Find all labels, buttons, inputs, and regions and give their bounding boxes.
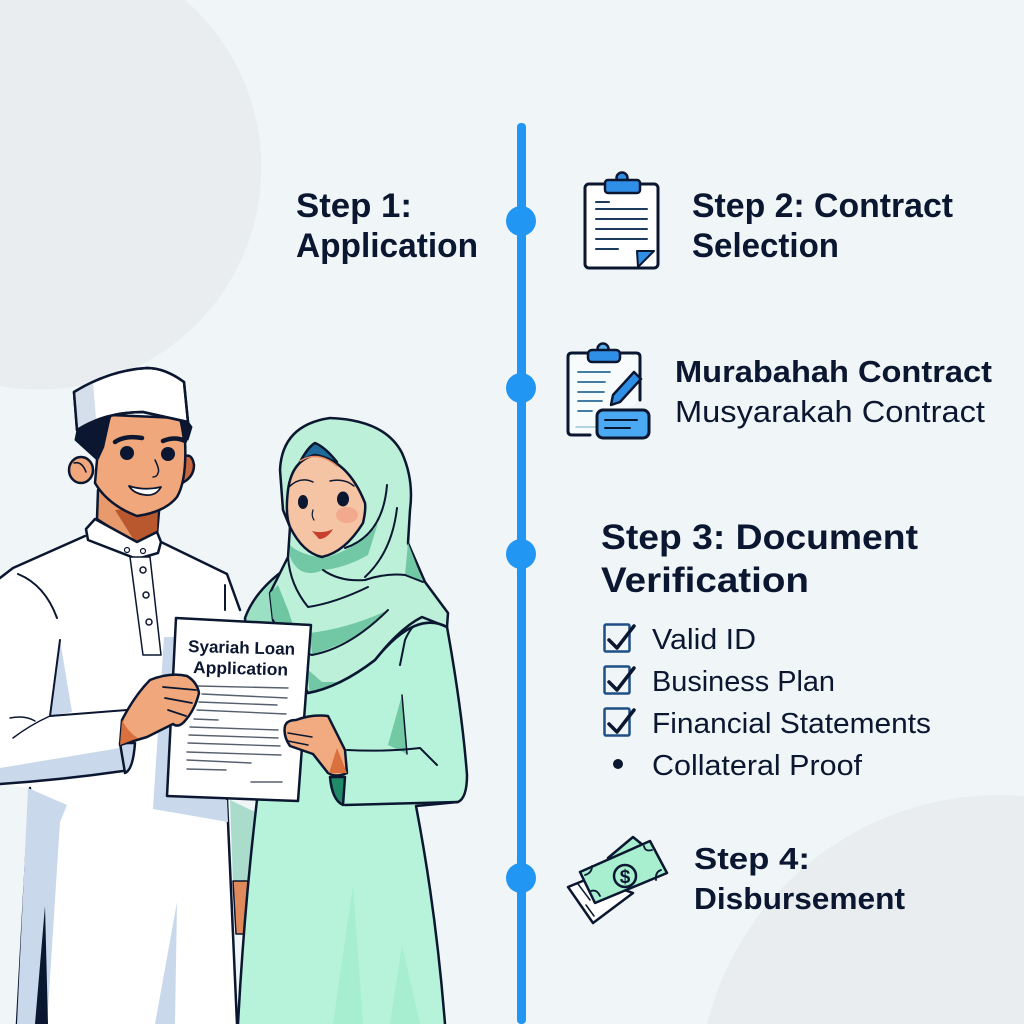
step 2 heading [692,187,953,265]
step 1 heading: Step 1: [296,187,412,225]
contract options: Murabahah Contract [675,354,992,389]
step 2 heading: Selection [692,227,839,265]
document checklist [604,624,931,782]
document checklist: Valid ID [652,624,756,656]
check: valid id [604,624,634,652]
application paper: Syariah Loan [188,637,295,659]
hair [75,416,192,460]
icon: banknotes [568,837,667,923]
contract options: Musyarakah Contract [675,394,985,429]
check: business plan [604,666,634,694]
man figure [0,368,240,1024]
document checklist: Financial Statements [652,708,931,740]
step 3 heading [601,518,918,600]
dress [238,615,467,1024]
icon: banknotes: $ [620,867,631,888]
contract options [675,354,992,429]
timeline [506,123,536,1024]
illustration: couple holding application [0,368,467,1024]
step 1 heading: Application [296,227,478,265]
step 1 heading [296,187,478,265]
step 4 heading: Step 4: [694,841,810,876]
document checklist: Business Plan [652,666,835,698]
step 3 heading: Verification [601,561,809,600]
step 2 heading: Step 2: Contract [692,187,953,225]
bullet: collateral proof [613,759,623,769]
application paper [167,618,311,801]
step 4 heading [694,841,905,916]
hijab [270,418,448,693]
step 4 heading: Disbursement [694,881,905,916]
neck [97,490,160,545]
icon: contract clipboard [585,172,658,268]
cap [74,368,188,430]
check: financial statements [604,708,634,736]
application paper: Application [193,658,288,679]
step 3 heading: Step 3: Document [601,518,918,557]
hands on paper [120,675,347,776]
document checklist: Collateral Proof [652,750,863,782]
woman figure [230,418,467,1024]
icon: clipboard with pen [568,344,649,438]
face [95,415,185,516]
left shoulder [245,567,300,690]
